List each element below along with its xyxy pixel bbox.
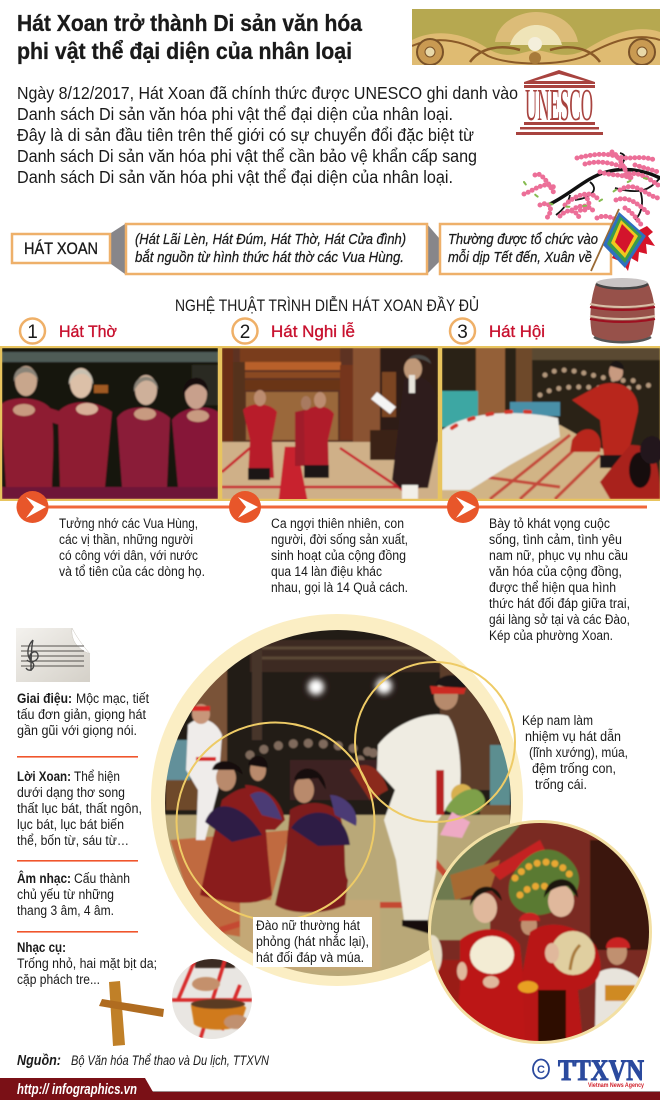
caption: male performer: trống cái. bbox=[535, 777, 587, 792]
text: melody note: Mộc mạc, tiết bbox=[76, 691, 149, 706]
text: lyrics note: Thể hiện bbox=[74, 769, 120, 784]
text: lyrics note bbox=[17, 769, 142, 848]
text: Hát Nghi lễ description: người, đời sống sản xuất, bbox=[271, 532, 408, 547]
text: music note: chủ yếu từ những bbox=[17, 887, 114, 902]
icon: arrow bullet 3 bbox=[447, 491, 479, 523]
text: Hát Nghi lễ description bbox=[271, 516, 408, 595]
text: music note: Âm nhạc: bbox=[17, 871, 71, 886]
logo: TTXVN: Vietnam News Agency bbox=[588, 1083, 645, 1089]
box: HÁT XOAN: HÁT XOAN bbox=[24, 239, 98, 258]
text: instruments note: cặp phách tre... bbox=[17, 972, 100, 987]
text: melody note: tấu đơn giản, giọng hát bbox=[17, 707, 146, 722]
source note bbox=[17, 1052, 270, 1069]
text: melody note: gần gũi với giọng nói. bbox=[17, 723, 137, 738]
text: instruments note: Trống nhỏ, hai mặt bịt da; bbox=[17, 956, 157, 971]
step 3 heading bbox=[450, 318, 545, 344]
box: occasion: mỗi dịp Tết đến, Xuân về bbox=[448, 249, 592, 266]
text: melody note: Giai điệu: bbox=[17, 691, 72, 706]
intro paragraph: Danh sách Di sản văn hóa phi vật thể đại diện của nhân loại. bbox=[17, 104, 453, 124]
icon: festival flag bbox=[591, 209, 655, 271]
step 1 heading: Hát Thờ bbox=[59, 322, 117, 341]
connector arrow 2 bbox=[427, 224, 439, 274]
caption: male performer: Kép nam làm bbox=[522, 713, 593, 728]
photo: small drum circle bbox=[170, 958, 254, 1042]
source note: Nguồn: bbox=[17, 1052, 61, 1069]
photo: Hát Hội gathering bbox=[440, 346, 660, 501]
photo: singers with round fans bbox=[422, 820, 660, 1045]
logo: TTXVN: TTXVN bbox=[558, 1054, 644, 1087]
source note: Bộ Văn hóa Thể thao và Du lịch, TTXVN bbox=[71, 1052, 270, 1068]
text: instruments note: Nhạc cụ: bbox=[17, 940, 66, 955]
timeline line bbox=[32, 506, 647, 508]
caption: male performer: (lĩnh xướng), múa, bbox=[529, 745, 628, 760]
step 2 heading bbox=[232, 318, 355, 344]
box: origin: (Hát Lãi Lèn, Hát Đúm, Hát Thờ, Hát Cửa đình) bbox=[135, 231, 406, 248]
footer bar bbox=[0, 1078, 660, 1100]
photo panel: main performance circle bbox=[151, 614, 523, 986]
caption: male performer: đệm trống con, bbox=[532, 761, 616, 776]
icon: peach blossom branch bbox=[524, 152, 660, 226]
caption: male performer bbox=[522, 713, 628, 792]
text: Hát Thờ description: Tưởng nhớ các Vua Hùng, bbox=[59, 516, 198, 531]
step 1 heading bbox=[20, 318, 117, 344]
icon: UNESCO logo bbox=[516, 70, 603, 135]
text: melody note bbox=[17, 691, 149, 738]
section heading: NGHỆ THUẬT TRÌNH DIỄN HÁT XOAN ĐẦY ĐỦ bbox=[175, 296, 479, 315]
icon: arrow bullet 2 bbox=[229, 491, 261, 523]
text: lyrics note: lục bát, lục bát biến bbox=[17, 817, 124, 832]
text: Hát Nghi lễ description: qua 14 làn điệu khác bbox=[271, 564, 382, 579]
box: occasion bbox=[440, 224, 611, 274]
text: Hát Nghi lễ description: nhau, gọi là 14 Quả cách. bbox=[271, 580, 408, 595]
text: Hát Hội description: văn hóa của cộng đồng, bbox=[489, 564, 622, 579]
icon: music sheet bbox=[16, 628, 90, 682]
text: music note: Cấu thành bbox=[74, 871, 130, 886]
footer bar: http:// infographics.vn bbox=[17, 1081, 137, 1098]
text: lyrics note: Lời Xoan: bbox=[17, 769, 71, 784]
text: Hát Thờ description bbox=[59, 516, 205, 579]
text: music note bbox=[17, 871, 130, 918]
text: lyrics note: dưới dạng thơ song bbox=[17, 785, 125, 800]
text: instruments note bbox=[17, 940, 157, 987]
intro paragraph: Danh sách Di sản văn hóa phi vật thể cần bảo vệ khẩn cấp sang bbox=[17, 146, 477, 166]
intro paragraph: Danh sách Di sản văn hóa phi vật thể đại diện của nhân loại. bbox=[17, 167, 453, 187]
text: Hát Hội description: được thể hiện qua hình bbox=[489, 580, 616, 595]
logo: TTXVN: C bbox=[537, 1064, 545, 1076]
text: Hát Thờ description: các vị thần, những người bbox=[59, 532, 193, 547]
icon: drum bbox=[590, 278, 655, 342]
box: HÁT XOAN bbox=[12, 234, 110, 263]
caption: male performer: nhiệm vụ hát dẫn bbox=[525, 729, 621, 744]
intro paragraph bbox=[17, 83, 518, 187]
text: Hát Hội description: Kép của phường Xoan. bbox=[489, 628, 613, 643]
text: Hát Hội description: sống, tình cảm, tình yêu bbox=[489, 532, 622, 547]
logo: TTXVN bbox=[533, 1054, 645, 1089]
step 1 heading: 1 bbox=[27, 322, 38, 343]
text: music note: thang 3 âm, 4 âm. bbox=[17, 903, 114, 918]
text: lyrics note: thất lục bát, thất ngôn, bbox=[17, 801, 142, 816]
icon: arrow bullet 1 bbox=[16, 491, 48, 523]
caption: female singers: phỏng (hát nhắc lại), bbox=[256, 934, 369, 949]
step 3 heading: 3 bbox=[457, 322, 468, 343]
text: Hát Thờ description: và tổ tiên của các dòng họ. bbox=[59, 564, 205, 579]
box: origin: bắt nguồn từ hình thức hát thờ các Vua Hùng. bbox=[135, 249, 404, 266]
photo: Hát Thờ singers bbox=[0, 346, 220, 501]
text: Hát Hội description: Bày tỏ khát vọng cuộc bbox=[489, 516, 610, 531]
icon: bamboo clappers bbox=[99, 981, 164, 1046]
box: occasion: Thường được tổ chức vào bbox=[448, 231, 598, 248]
caption: female singers: Đào nữ thường hát bbox=[256, 918, 360, 933]
intro paragraph: Đây là di sản đầu tiên trên thế giới có sự chuyển đổi đặc biệt từ bbox=[17, 125, 474, 145]
caption: female singers: hát đối đáp và múa. bbox=[256, 950, 364, 965]
text: Hát Hội description: thức hát đối đáp giữa trai, bbox=[489, 596, 630, 611]
intro paragraph: Ngày 8/12/2017, Hát Xoan đã chính thức được UNESCO ghi danh vào bbox=[17, 83, 518, 103]
text: Hát Nghi lễ description: Ca ngợi thiên nhiên, con bbox=[271, 516, 404, 531]
highlight ring: female singers bbox=[176, 722, 374, 920]
box: origin bbox=[126, 224, 427, 274]
decorative ornament banner bbox=[412, 9, 660, 65]
title bbox=[17, 10, 362, 64]
text: Hát Hội description: nam nữ, phục vụ nhu cầu bbox=[489, 548, 628, 563]
flow: Hát Xoan origin and occasion bbox=[12, 224, 611, 274]
connector arrow 1 bbox=[111, 224, 125, 274]
photo: Hát Nghi lễ ceremony bbox=[220, 346, 440, 501]
text: Hát Thờ description: có công với dân, với nước bbox=[59, 548, 198, 563]
text: Hát Hội description: gái làng sở tại và các Đào, bbox=[489, 612, 630, 627]
step 2 heading: 2 bbox=[240, 322, 250, 343]
title: phi vật thể đại diện của nhân loại bbox=[17, 38, 352, 64]
text: Hát Hội description bbox=[489, 516, 630, 643]
step 3 heading: Hát Hội bbox=[489, 322, 545, 341]
title: Hát Xoan trở thành Di sản văn hóa bbox=[17, 10, 362, 36]
text: Hát Nghi lễ description: sinh hoạt của cộng đồng bbox=[271, 548, 406, 563]
step 2 heading: Hát Nghi lễ bbox=[271, 322, 355, 341]
text: lyrics note: thể, bốn từ, sáu từ… bbox=[17, 833, 129, 848]
highlight ring: male performer bbox=[355, 662, 515, 822]
caption: female singers bbox=[253, 917, 372, 967]
